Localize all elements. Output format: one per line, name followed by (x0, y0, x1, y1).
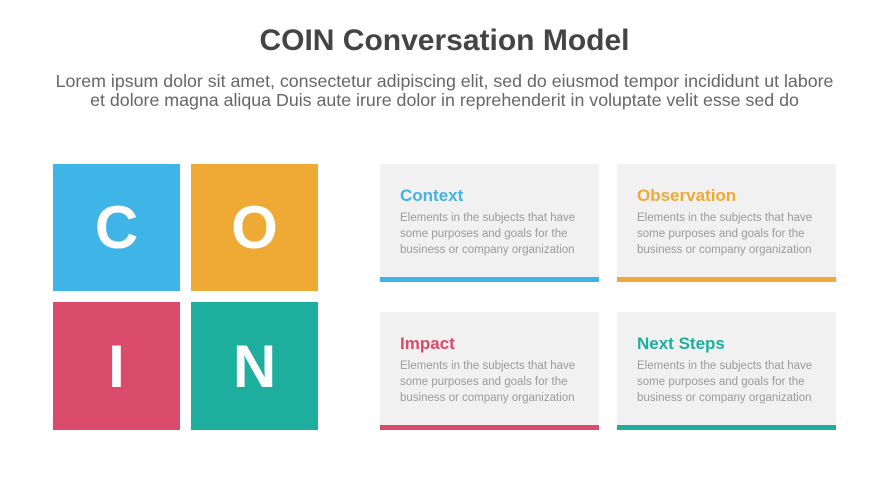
square: I (53, 302, 180, 430)
subtitle: et dolore magna aliqua Duis aute irure dolor in reprehenderit in voluptate velit esse sed do (90, 90, 799, 110)
square: C (53, 164, 180, 291)
card: Next Steps (617, 312, 836, 430)
subtitle: Lorem ipsum dolor sit amet, consectetur adipiscing elit, sed do eiusmod tempor incididunt ut labore (56, 71, 833, 91)
card: Context (380, 164, 599, 282)
card: Impact: Impact (400, 334, 455, 353)
card: Impact: Elements in the subjects that have some purposes and goals for the business or company organization (400, 360, 575, 404)
card: Context: Elements in the subjects that have some purposes and goals for the business or company organization (400, 212, 575, 256)
square: O (191, 164, 318, 291)
card: Next Steps: Next Steps (637, 334, 725, 353)
square: C: C (95, 194, 138, 261)
card: Context: Context (400, 186, 463, 205)
card: Impact (380, 312, 599, 430)
square: N (191, 302, 318, 430)
card: Observation (617, 164, 836, 282)
square: I: I (108, 332, 125, 400)
square: N: N (233, 332, 276, 400)
card: Observation: Elements in the subjects that have some purposes and goals for the business or company organization (637, 212, 812, 256)
title: COIN Conversation Model (259, 24, 630, 57)
card: Observation: Observation (637, 186, 736, 205)
square: O: O (231, 194, 278, 261)
card: Next Steps: Elements in the subjects that have some purposes and goals for the business or company organization (637, 360, 812, 404)
subtitle (56, 71, 833, 110)
